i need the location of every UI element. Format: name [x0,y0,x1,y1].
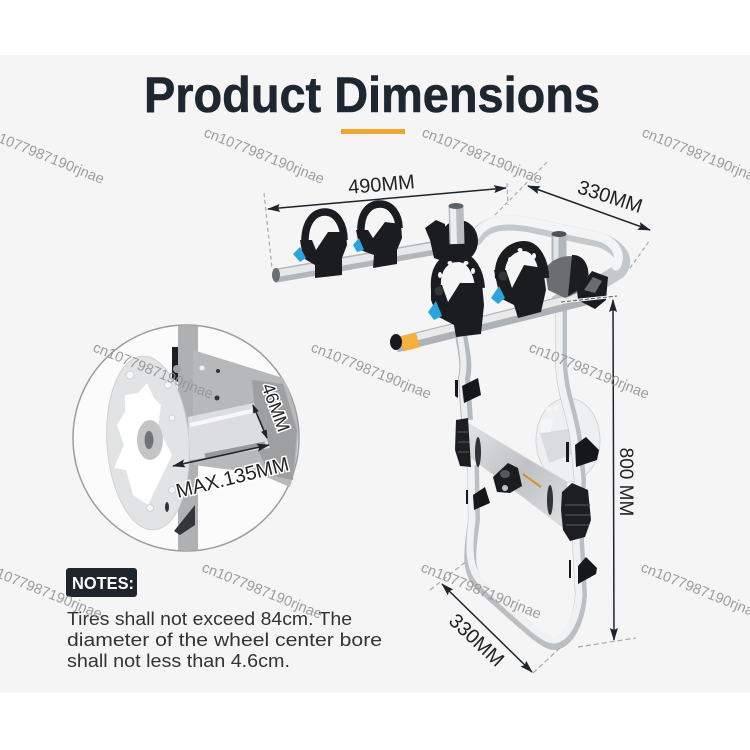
inset: vertical post [178,326,198,550]
rack: rear wheel disc [536,398,600,482]
inset: wheel disc [101,353,195,533]
inset: wheel hub [137,420,163,460]
dimension: 800 MM [578,300,636,647]
inset circle [73,325,299,551]
rack: rear crossbar tube [274,245,440,276]
watermarks: cn1077987190rjnae [309,340,433,403]
dimension: 330MM top [495,160,650,268]
inset: MAX.135MM dimension: MAX.135MM [174,454,291,503]
rack: front crossbar tube [396,295,585,345]
inset: arm box [188,403,270,460]
bike rack product [272,203,623,644]
inset: back plate [193,350,298,487]
notes badge [66,568,137,597]
notes badge: NOTES: [72,573,134,593]
clamp 1 [293,212,347,278]
clamp 2 [353,204,402,268]
rack: yellow tube band [402,340,418,344]
dimension: 330MM top: 330MM [575,177,645,218]
watermarks: cn1077987190rjnae [200,560,324,623]
notes text: shall not less than 4.6cm. [67,650,290,671]
title: Product Dimensions [144,67,600,123]
rack: upper U-shaped bar [476,220,623,302]
rack: front tube end cap [390,334,402,350]
watermarks: cn1077987190rjnae [420,125,544,188]
rack: orange plate label [523,474,541,487]
rack: strap buckle [560,271,618,309]
watermarks: cn1077987190rjnae [419,560,543,623]
rack: lower frame loop [470,305,581,644]
dimension: 490MM: 490MM [347,171,416,199]
notes text: diameter of the wheel center bore [67,629,382,650]
watermarks [0,125,750,623]
clamp 4 [491,246,546,318]
title accent bar [341,129,405,134]
rack: lower support clips [455,378,599,584]
rack: rear round clamp plate [425,220,478,262]
inset: wheel disc holes [126,371,176,512]
clamp 3 [428,257,484,337]
watermarks: cn1077987190rjnae [527,340,651,403]
rack: rear vertical post [448,203,464,244]
dimension: 800 MM: 800 MM [615,448,636,516]
rack: plate knob [493,463,522,493]
rack: silver mounting plate [467,423,567,527]
dimension: 490MM [264,171,508,268]
rack: front post and round plate [545,231,589,298]
inset: bracket clamp [172,347,178,382]
watermarks: cn1077987190rjnae [91,340,215,403]
dimension: 330MM bottom [430,560,563,673]
watermarks: cn1077987190rjnae [202,125,326,188]
rack: left post [458,322,467,420]
inset: 46MM dimension: 46MM [258,381,294,435]
rack: plate slots [475,437,553,515]
inset: wheel bracket detail [73,325,299,551]
dimension: 330MM bottom: 330MM [444,610,508,671]
rack: rear tube end cap [272,268,280,282]
notes text [67,608,382,671]
notes text: Tires shall not exceed 84cm. The [67,608,352,629]
rack: rubber grips [455,418,591,541]
